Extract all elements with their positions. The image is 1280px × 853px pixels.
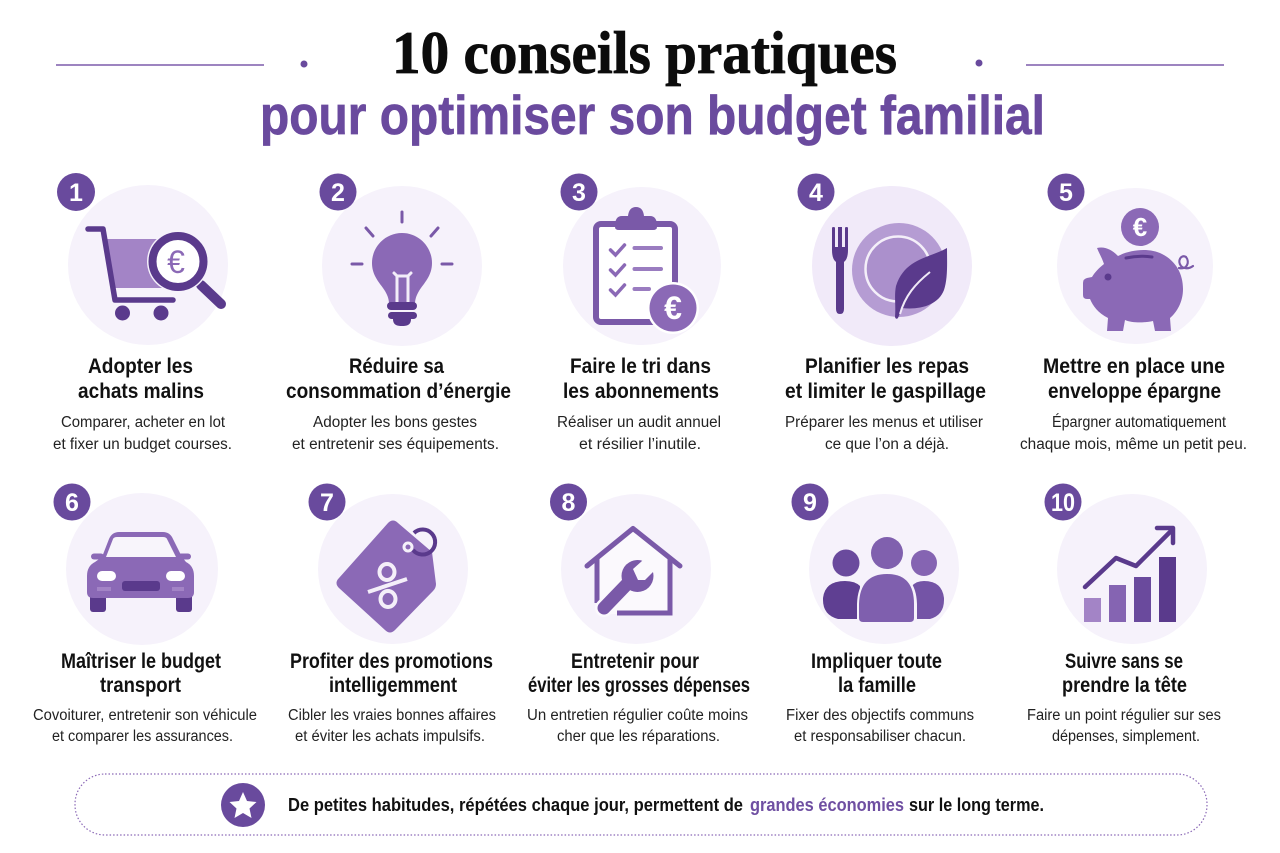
heading 2: consommation d’énergie <box>286 380 511 403</box>
description 10: Faire un point régulier sur ses <box>1027 707 1221 724</box>
card 2: énergie <box>286 174 511 453</box>
badge 5 <box>1048 174 1084 210</box>
icon: car <box>87 532 194 612</box>
icon: growth chart <box>1084 528 1176 622</box>
heading 5: enveloppe épargne <box>1048 380 1221 403</box>
heading 10: prendre la tête <box>1062 674 1187 697</box>
description 1: et fixer un budget courses. <box>53 436 232 453</box>
callout banner <box>75 774 1207 835</box>
description 4 <box>785 414 983 453</box>
description 5 <box>1020 414 1247 453</box>
description 9: Fixer des objectifs communs <box>786 707 974 724</box>
badge 6: 6 <box>65 489 79 517</box>
badge 4: 4 <box>809 179 823 207</box>
heading 2 <box>286 355 511 403</box>
badge 9 <box>792 484 828 520</box>
badge 6 <box>54 484 90 520</box>
heading 5 <box>1043 355 1225 403</box>
heading 8 <box>528 650 750 697</box>
badge 2: 2 <box>331 179 345 207</box>
icon: star <box>221 783 265 827</box>
description 3: Réaliser un audit annuel <box>557 414 721 431</box>
heading 4 <box>785 355 986 403</box>
heading 10: Suivre sans se <box>1065 650 1183 673</box>
description 7: et éviter les achats impulsifs. <box>295 728 485 745</box>
description 6: et comparer les assurances. <box>52 728 233 745</box>
heading 4: et limiter le gaspillage <box>785 380 986 403</box>
heading 7 <box>290 650 493 697</box>
badge 2 <box>320 174 356 210</box>
icon: house with wrench <box>587 528 680 614</box>
heading 1: Adopter les <box>88 355 193 378</box>
description 9: et responsabiliser chacun. <box>794 728 966 745</box>
icon: light bulb <box>352 212 452 326</box>
callout text: sur le long terme. <box>909 795 1044 815</box>
badge 1 <box>57 173 95 211</box>
description 2 <box>292 414 499 453</box>
badge 8: 8 <box>562 489 576 517</box>
card 10: suivi <box>1027 484 1221 745</box>
heading 5: Mettre en place une <box>1043 355 1225 378</box>
heading 8: Entretenir pour <box>571 650 699 673</box>
heading 9: Impliquer toute <box>811 650 942 673</box>
icon: family of three <box>823 537 944 622</box>
description 7 <box>288 707 496 745</box>
description 1 <box>53 414 232 453</box>
heading 3 <box>563 355 719 403</box>
heading 6: Maîtriser le budget <box>61 650 221 673</box>
badge 10 <box>1044 484 1082 520</box>
icon: cart with magnifier: € <box>167 244 185 280</box>
description 5: Épargner automatiquement <box>1052 414 1227 431</box>
description 4: Préparer les menus et utiliser <box>785 414 983 431</box>
description 8 <box>527 707 748 745</box>
description 6 <box>33 707 257 745</box>
badge 3 <box>560 174 598 210</box>
card 4: repas <box>785 174 986 453</box>
heading 6: transport <box>100 674 181 697</box>
description 7: Cibler les vraies bonnes affaires <box>288 707 496 724</box>
badge 1: 1 <box>69 179 83 207</box>
description 9 <box>786 707 974 745</box>
description 4: ce que l’on a déjà. <box>825 436 949 453</box>
heading 4: Planifier les repas <box>805 355 969 378</box>
description 10: dépenses, simplement. <box>1052 728 1200 745</box>
badge 4 <box>798 174 834 210</box>
badge 7: 7 <box>320 489 334 517</box>
title: 10 conseils pratiques <box>392 20 897 86</box>
heading 1 <box>78 355 204 403</box>
description 3 <box>557 414 721 453</box>
description 6: Covoiturer, entretenir son véhicule <box>33 707 257 724</box>
description 10 <box>1027 707 1221 745</box>
icon: cart with magnifier <box>88 229 221 320</box>
badge 8 <box>550 484 587 520</box>
card 8: entretien <box>527 484 750 745</box>
icon: clipboard with euro: € <box>664 290 682 326</box>
callout text <box>288 795 1044 815</box>
description 2: Adopter les bons gestes <box>313 414 477 431</box>
badge 5: 5 <box>1059 179 1073 207</box>
callout text: grandes économies <box>750 795 904 815</box>
heading 7: intelligemment <box>329 674 457 697</box>
icon: clipboard with euro <box>596 207 699 334</box>
icon: price tag with percent <box>336 520 436 632</box>
heading 2: Réduire sa <box>349 355 444 378</box>
card 9: famille <box>786 484 974 745</box>
description 5: chaque mois, même un petit peu. <box>1020 436 1247 453</box>
heading 8: éviter les grosses dépenses <box>528 674 750 697</box>
heading 3: Faire le tri dans <box>570 355 711 378</box>
description 2: et entretenir ses équipements. <box>292 436 499 453</box>
description 8: Un entretien régulier coûte moins <box>527 707 748 724</box>
subtitle: pour optimiser son budget familial <box>260 84 1045 146</box>
card 5: épargne <box>1020 174 1247 453</box>
card 6: transport <box>33 484 257 745</box>
card 7: promotions <box>288 484 496 745</box>
icon: piggy bank and coin: € <box>1133 212 1147 242</box>
header <box>56 20 1224 146</box>
badge 3: 3 <box>572 179 586 207</box>
description 8: cher que les réparations. <box>557 728 720 745</box>
heading 7: Profiter des promotions <box>290 650 493 673</box>
card 3: abonnements <box>557 174 721 453</box>
icon: plate, fork and leaf <box>832 223 947 319</box>
description 1: Comparer, acheter en lot <box>61 414 226 431</box>
icon: piggy bank and coin <box>1083 208 1193 331</box>
heading 9: la famille <box>838 674 916 697</box>
heading 6 <box>61 650 221 697</box>
heading 9 <box>811 650 942 697</box>
callout text: De petites habitudes, répétées chaque jour, permettent de <box>288 795 743 815</box>
badge 7 <box>308 484 346 520</box>
description 3: et résilier l’inutile. <box>579 436 701 453</box>
badge 9: 9 <box>803 489 817 517</box>
heading 3: les abonnements <box>563 380 719 403</box>
heading 10 <box>1062 650 1187 697</box>
heading 1: achats malins <box>78 380 204 403</box>
card 1: achats malins <box>53 173 232 453</box>
badge 10: 10 <box>1051 489 1075 517</box>
